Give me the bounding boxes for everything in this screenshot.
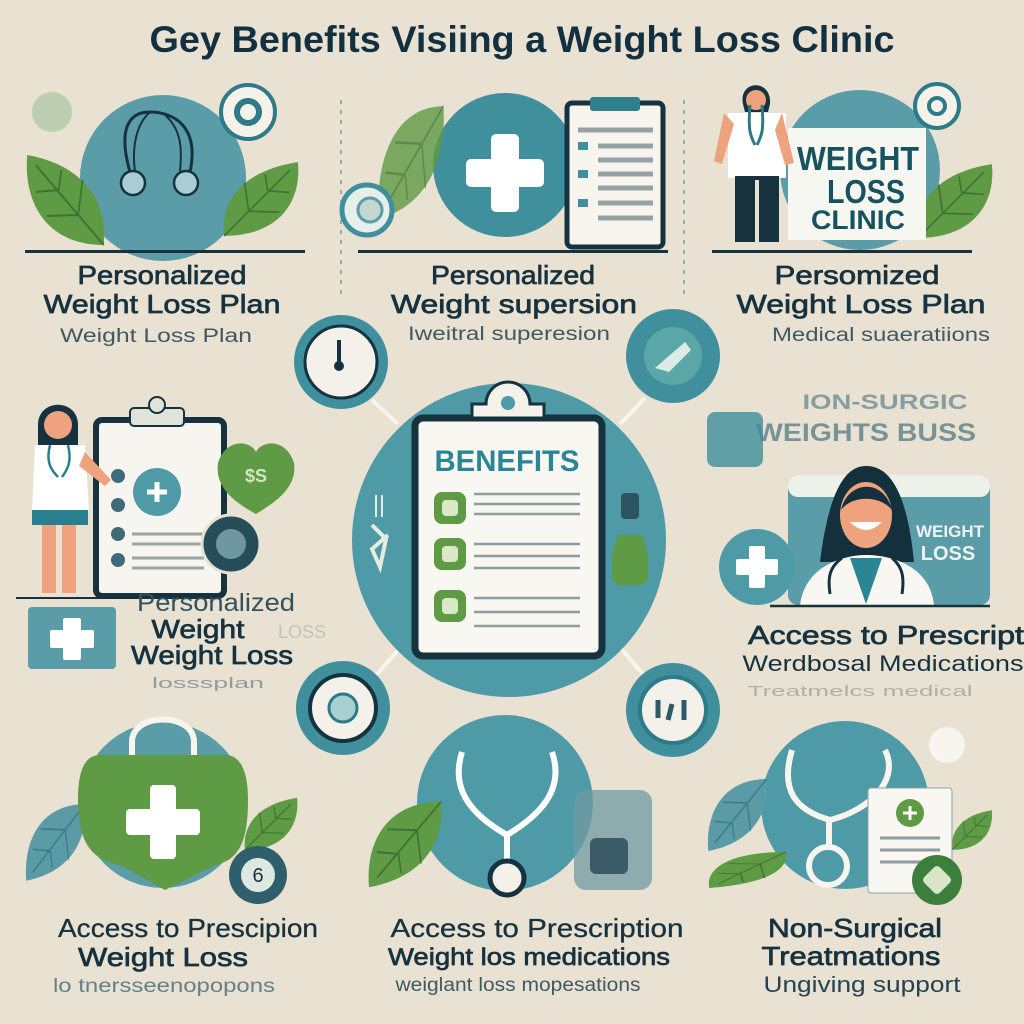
icon: screen with doctor (707, 412, 990, 606)
icon: stethoscope (369, 715, 652, 895)
heading line 3: Weight Loss (131, 640, 293, 670)
panel: central benefits clipboard (352, 382, 666, 697)
panel: right middle (707, 391, 1024, 700)
heading line 2: Weight supersion (391, 289, 637, 319)
heading: Personalized (78, 260, 246, 290)
panel: top centre (342, 93, 668, 345)
panel: top right (712, 84, 992, 346)
subtext: weiglant loss mopesations (394, 975, 640, 996)
icon: badge upper right (626, 309, 720, 403)
heading: Access to Prescript (748, 620, 1024, 650)
icon: clinician and clinic sign (712, 84, 992, 253)
clipboard (415, 382, 602, 656)
heading line 2: Weight Loss Plan (736, 289, 986, 319)
icon: badge lower left (296, 661, 390, 755)
panel: left middle (16, 397, 326, 692)
subtext: losssplan (152, 675, 264, 692)
small side icons (372, 493, 648, 585)
heading: Non-Surgical (768, 913, 942, 943)
list item 1 (434, 492, 580, 524)
icon: clinician and clinic sign: WEIGHT (797, 140, 919, 177)
heading: Access to Prescription (390, 913, 684, 943)
heading line 2: Treatmations (762, 941, 940, 971)
panel: bottom centre (369, 715, 684, 996)
dashed dividers (341, 100, 684, 300)
connector lines (372, 398, 648, 680)
subtext: Medical suaeratiions (772, 325, 990, 346)
list item 2 (434, 538, 580, 570)
icon: green medical bag (26, 720, 297, 904)
central circle (352, 383, 666, 697)
icon: clinician and clinic sign: LOSS (827, 173, 905, 210)
panel: bottom left (26, 720, 318, 997)
icon: screen with doctor: LOSS (921, 543, 975, 565)
title: Gey Benefits Visiing a Weight Loss Clinic (150, 19, 894, 60)
icon: stethoscope and report (708, 721, 992, 905)
heading line 2: Werdbosal Medications (742, 651, 1024, 676)
subtext: Ungiving support (764, 972, 960, 997)
icon: clinician with clipboard (16, 397, 294, 669)
heading: Personalized (137, 589, 295, 617)
heading: Persomized (774, 260, 940, 290)
icon: badge lower right (626, 663, 720, 757)
panel: bottom right (708, 721, 992, 997)
icon: screen with doctor: WEIGHT (916, 522, 985, 541)
heading line 2: Weight (152, 614, 245, 644)
heading line 2: Weight Loss Plan (44, 289, 280, 319)
heading: Personalized (431, 260, 595, 290)
faded text: LOSS (278, 622, 326, 642)
icon: clinician with clipboard: $S (245, 466, 267, 486)
blurred heading: ION-SURGIC (802, 391, 968, 414)
heading line 2: Weight Loss (78, 942, 248, 972)
heading: benefits: BENEFITS (434, 445, 580, 478)
subtext: Treatmelcs medical (748, 683, 972, 700)
subtext: Weight Loss Plan (60, 326, 252, 347)
icon: circle with stethoscope and leaves (25, 85, 305, 261)
heading line 2: Weight los medications (388, 944, 670, 971)
icon: medical cross and clipboard (342, 93, 668, 253)
blurred heading line 2: WEIGHTS BUSS (756, 419, 976, 447)
icon: clock badge (294, 315, 388, 409)
icon: green medical bag: 6 (252, 865, 264, 887)
heading: Access to Prescipion (58, 913, 318, 943)
icon: clinician and clinic sign: CLINIC (811, 205, 905, 235)
subtext: Iweitral superesion (408, 324, 610, 345)
list item 3 (434, 590, 580, 626)
subtext: lo tnersseenopopons (53, 976, 275, 997)
panel: top left (25, 85, 305, 347)
